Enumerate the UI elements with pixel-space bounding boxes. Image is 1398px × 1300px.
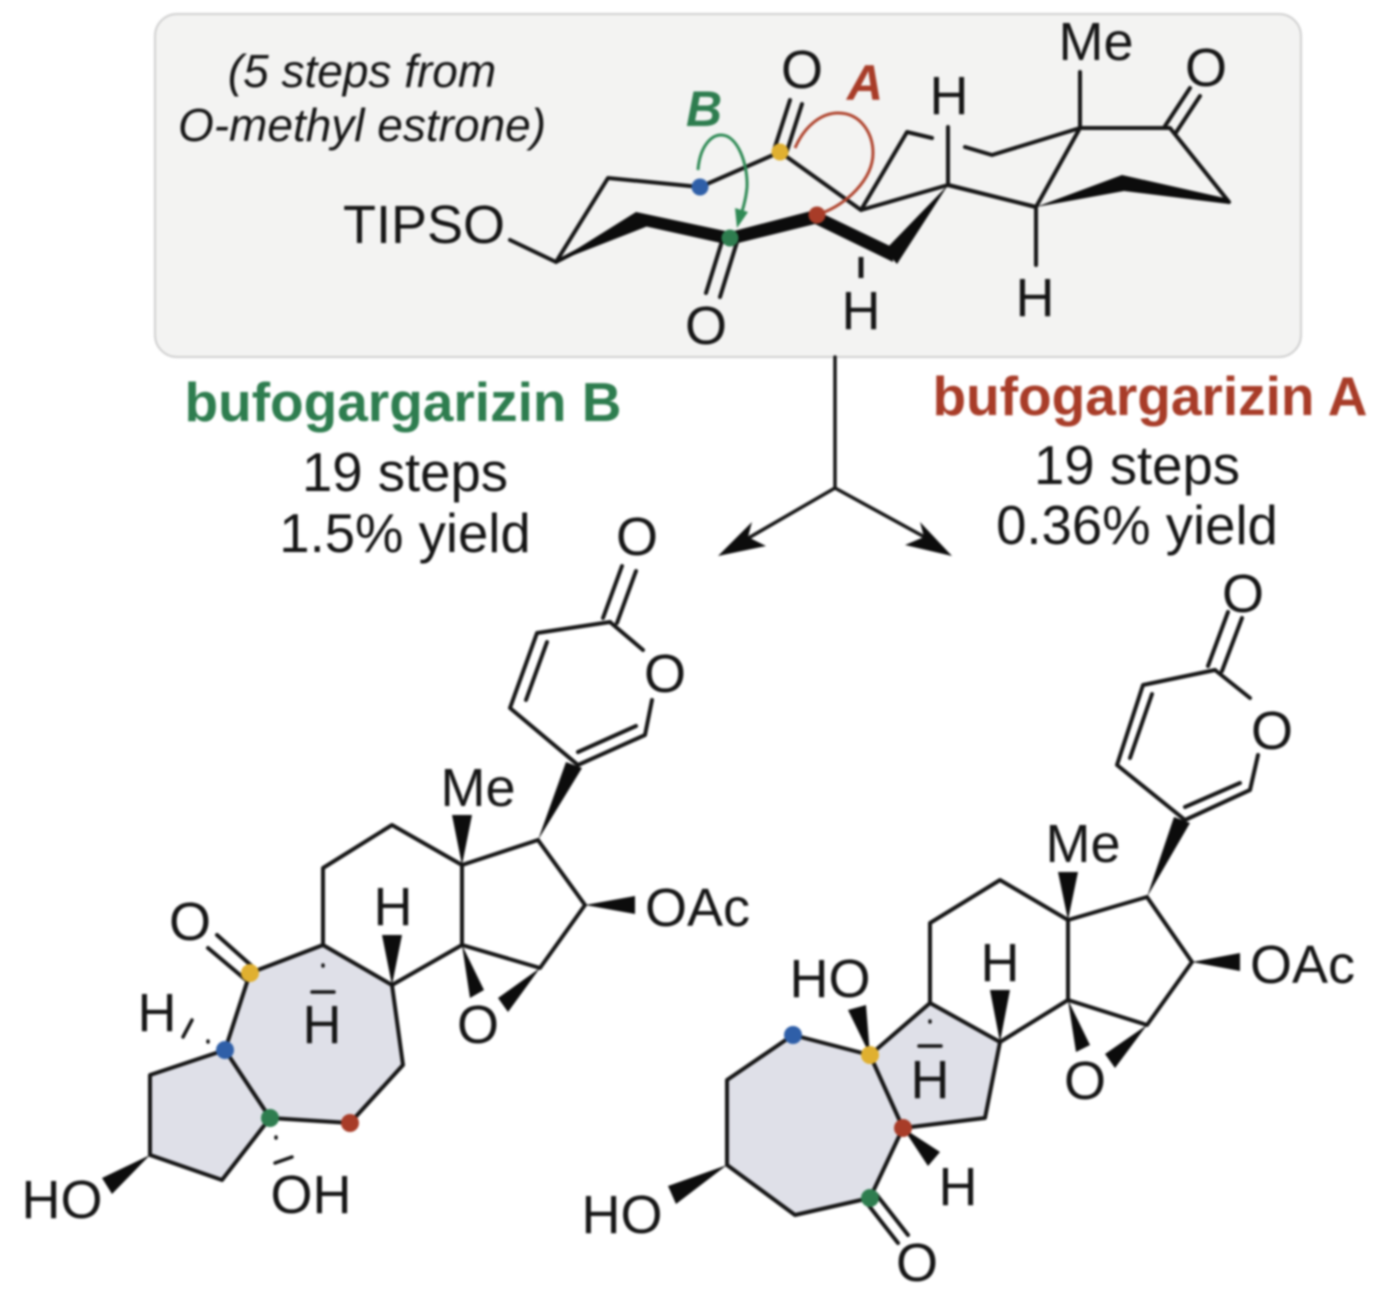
molecule: starting diketone: H bbox=[1016, 268, 1054, 328]
molecule: bufogargarizin A: HO bbox=[582, 1185, 662, 1245]
heading: bufogargarizin B: bufogargarizin B bbox=[185, 371, 621, 433]
molecule: bufogargarizin B: Me bbox=[440, 758, 516, 818]
molecule: bufogargarizin A: O bbox=[1222, 564, 1264, 624]
stats: bufogargarizin A bbox=[996, 435, 1278, 556]
molecule: bufogargarizin A: O bbox=[1251, 701, 1293, 761]
molecule: starting diketone: O bbox=[685, 296, 727, 356]
stats: bufogargarizin A: 0.36% yield bbox=[996, 495, 1278, 556]
arrow: bond migration B bbox=[698, 135, 748, 228]
molecule: starting diketone bbox=[343, 12, 1229, 356]
molecule: bufogargarizin A bbox=[582, 564, 1355, 1293]
molecule: bufogargarizin A: O bbox=[896, 1233, 938, 1293]
molecule: bufogargarizin B: O bbox=[644, 644, 686, 704]
stats: bufogargarizin B: 1.5% yield bbox=[279, 503, 531, 564]
molecule: bufogargarizin B: HO bbox=[22, 1170, 102, 1230]
label: B: B bbox=[686, 81, 722, 137]
note: synthesis origin: O-methyl estrone) bbox=[178, 99, 546, 151]
molecule: starting diketone: O bbox=[781, 40, 823, 100]
molecule: starting diketone: H bbox=[842, 281, 880, 341]
molecule: starting diketone: Me bbox=[1058, 12, 1134, 72]
molecule: bufogargarizin B: O bbox=[457, 995, 499, 1055]
molecule: starting diketone: H bbox=[930, 66, 968, 126]
note: synthesis origin: (5 steps from bbox=[228, 45, 496, 97]
heading: bufogargarizin A bbox=[933, 365, 1367, 556]
arrow: divergent branches bbox=[718, 357, 952, 556]
panel: starting material bbox=[155, 12, 1301, 357]
heading: bufogargarizin B bbox=[185, 371, 621, 564]
molecule: starting diketone: O bbox=[1185, 38, 1227, 98]
molecule: bufogargarizin A: HO bbox=[790, 949, 870, 1009]
stats: bufogargarizin B bbox=[279, 442, 531, 564]
molecule: bufogargarizin A: H bbox=[980, 933, 1020, 993]
molecule: bufogargarizin B: OAc bbox=[645, 878, 750, 938]
molecule: bufogargarizin B: O bbox=[169, 892, 211, 952]
molecule: bufogargarizin A: OAc bbox=[1250, 935, 1355, 995]
stats: bufogargarizin B: 19 steps bbox=[302, 442, 508, 503]
molecule: bufogargarizin A: O bbox=[1064, 1051, 1106, 1111]
heading: bufogargarizin A: bufogargarizin A bbox=[933, 365, 1367, 427]
molecule: bufogargarizin B: OH bbox=[270, 1165, 352, 1225]
stats: bufogargarizin A: 19 steps bbox=[1034, 435, 1240, 496]
label: A: A bbox=[845, 55, 883, 111]
molecule: bufogargarizin A: H bbox=[910, 1050, 950, 1110]
molecule: bufogargarizin B: H bbox=[374, 877, 412, 937]
molecule: starting diketone: TIPSO bbox=[343, 195, 505, 255]
molecule: bufogargarizin B: H bbox=[138, 983, 176, 1043]
molecule: bufogargarizin B bbox=[22, 507, 750, 1230]
molecule: bufogargarizin B: H bbox=[302, 995, 342, 1055]
molecule: bufogargarizin A: H bbox=[938, 1157, 978, 1217]
note: synthesis origin bbox=[178, 45, 546, 151]
molecule: bufogargarizin B: O bbox=[616, 507, 658, 567]
arrow: bond migration A bbox=[795, 113, 873, 213]
atom markers bbox=[692, 144, 826, 246]
molecule: bufogargarizin A: Me bbox=[1045, 814, 1121, 874]
